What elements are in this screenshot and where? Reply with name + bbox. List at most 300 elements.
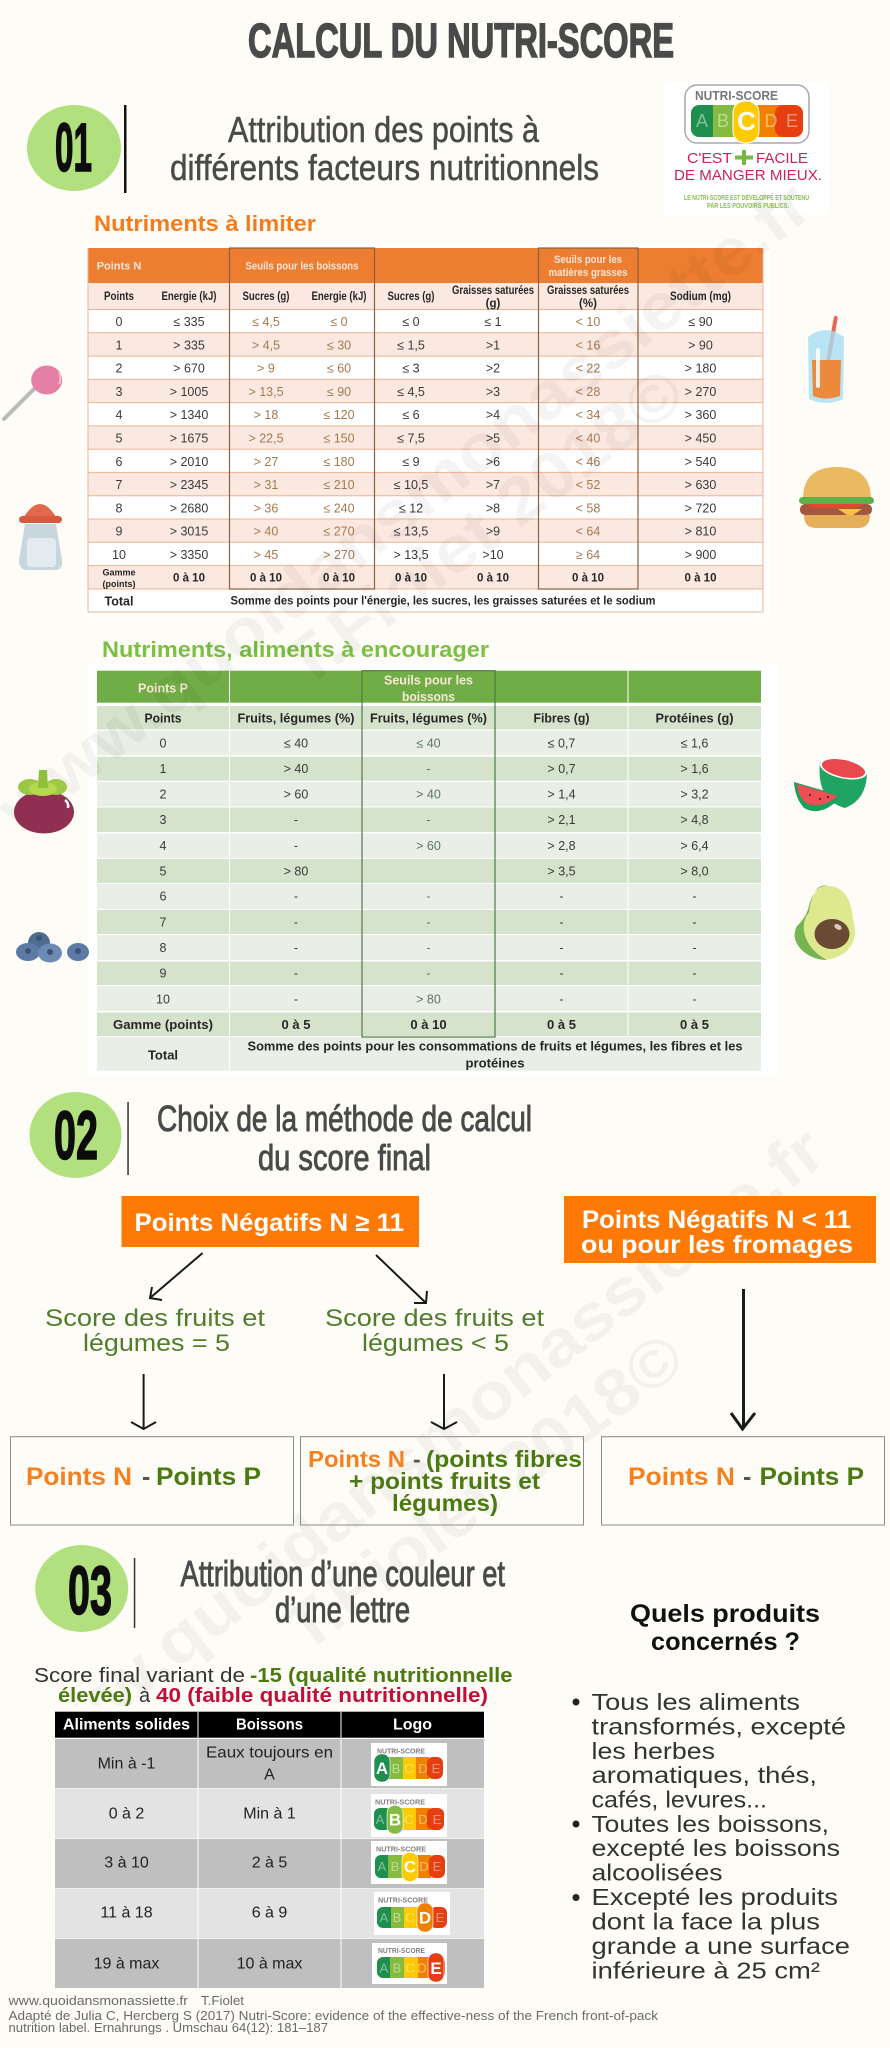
data rows P: - [426, 762, 431, 776]
text: fruit score below 5: légumes < 5 [362, 1330, 509, 1357]
header row [55, 1712, 484, 1738]
row bands [55, 1739, 484, 1988]
logo D: D [419, 1908, 431, 1928]
data rows N: > 9 [257, 362, 275, 376]
logo D: E [436, 1910, 445, 1925]
slice [794, 782, 842, 811]
data rows P: - [294, 967, 298, 981]
range row P: 0 à 5 [282, 1017, 310, 1032]
data rows N: >6 [486, 455, 500, 469]
text: final score range: 40 (faible qualité nutritionnelle) [156, 1685, 488, 1707]
data rows P: > 0,7 [547, 762, 576, 776]
divider 01 [124, 105, 126, 193]
result box middle: (points fibres [426, 1446, 582, 1472]
data rows P: > 80 [284, 864, 308, 878]
data rows P: 2 [160, 787, 167, 801]
heading: nutriments à limiter: Nutriments à limiter [94, 211, 316, 236]
icon: mangosteen [14, 770, 74, 834]
logo E: E [430, 1959, 442, 1978]
data rows N: ≤ 210 [323, 478, 355, 492]
header row: Logo [393, 1716, 432, 1734]
data rows N: >2 [486, 362, 500, 376]
data rows P: - [426, 941, 431, 955]
column headings P: Fibres (g) [534, 710, 590, 726]
arrow: to score equals 5 [150, 1253, 203, 1300]
range row N: (points) [102, 579, 136, 589]
logo E: C [405, 1960, 415, 1976]
heading 02 [157, 1098, 532, 1178]
data rows N: >3 [486, 385, 500, 399]
data rows N: < 34 [576, 408, 600, 422]
heading 03: Attribution d’une couleur et [180, 1553, 505, 1594]
box: N below 11 or cheese: ou pour les fromages [581, 1231, 853, 1259]
data rows P: ≤ 0,7 [548, 737, 575, 751]
data rows N: > 27 [254, 455, 278, 469]
data rows P: > 4,8 [680, 813, 709, 827]
total row P: Somme des points pour les consommations de fruits et légumes, les fibres et les [248, 1038, 742, 1054]
Nutri-Score campaign logo: D [764, 111, 778, 131]
data rows P: > 1,4 [547, 787, 576, 801]
range row N: 0 à 10 [395, 572, 427, 584]
data rows N: 9 [116, 525, 123, 539]
logo B: NUTRI-SCORE [375, 1798, 425, 1806]
number badge 01: 01 [55, 109, 92, 186]
header band P: Seuils pour les [384, 672, 473, 688]
logo B: B [389, 1810, 401, 1830]
box: N below 11 or cheese [564, 1196, 876, 1263]
row text: 0 à 2 [109, 1806, 144, 1822]
data rows P: ≤ 40 [416, 737, 441, 751]
heading: nutriments à encourager: Nutriments, aliments à encourager [102, 637, 489, 662]
arrow: to score below 5 [376, 1255, 427, 1303]
data rows N: > 1675 [170, 431, 208, 445]
data rows N: < 46 [576, 455, 600, 469]
bullet one: les herbes [592, 1738, 715, 1764]
number badge 03: 03 [68, 1552, 112, 1629]
text: fruit score equals 5: légumes = 5 [83, 1330, 230, 1357]
logo B: D [418, 1812, 428, 1827]
beverage threshold box P [362, 671, 495, 1037]
data rows P: - [294, 941, 298, 955]
data rows N: ≤ 240 [323, 502, 355, 516]
data rows P: - [294, 992, 298, 1006]
column headings N: Points [104, 291, 134, 303]
data rows P: > 8,0 [680, 864, 709, 878]
data rows N: ≤ 4,5 [252, 315, 280, 329]
data rows N: ≤ 1 [484, 315, 502, 329]
data rows P: - [692, 890, 697, 904]
data rows N: ≤ 180 [323, 455, 355, 469]
text: fruit score below 5: Score des fruits et [325, 1305, 544, 1332]
data rows N: 2 [116, 362, 123, 376]
data rows N: < 28 [576, 385, 600, 399]
data rows N: 8 [116, 502, 123, 516]
icon: lollipop [4, 366, 62, 419]
range row N: 0 à 10 [477, 572, 509, 584]
data rows N: ≤ 90 [327, 385, 351, 399]
logo B: C [404, 1812, 414, 1827]
data rows N: ≤ 4,5 [397, 385, 425, 399]
row text: 2 à 5 [252, 1854, 287, 1872]
data rows N: > 90 [688, 338, 713, 352]
data rows P: - [559, 967, 564, 981]
column headings N: Energie (kJ) [312, 291, 367, 303]
data rows N: >8 [486, 502, 500, 516]
data rows P: - [559, 941, 564, 955]
footer credits: www.quoidansmonassiette.fr [7, 1993, 189, 2008]
logo E: A [380, 1960, 389, 1976]
logo A: B [392, 1761, 400, 1776]
logo D: A [380, 1910, 389, 1925]
data rows P: 9 [160, 967, 167, 981]
range row N: 0 à 10 [572, 572, 604, 584]
data rows P: > 3,5 [547, 864, 576, 878]
data rows N: < 40 [576, 431, 600, 445]
column headings N: Graisses saturées [547, 285, 629, 297]
data rows N: > 2010 [170, 455, 208, 469]
table: points P [88, 664, 778, 1076]
data rows N: 7 [116, 478, 123, 492]
data rows P: > 6,4 [680, 839, 709, 853]
range row P: Gamme (points) [113, 1017, 213, 1032]
result box left [10, 1437, 294, 1525]
text: final score range: -15 (qualité nutritionnelle [250, 1665, 512, 1687]
data rows N: ≤ 335 [173, 315, 205, 329]
data rows N: ≤ 30 [327, 338, 351, 352]
column headings N: Sucres (g) [242, 291, 290, 303]
result box middle [300, 1437, 584, 1525]
data rows P: > 3,2 [680, 787, 709, 801]
data rows N: > 900 [685, 548, 716, 562]
data rows N: ≤ 10,5 [394, 478, 428, 492]
bullet three [592, 1884, 850, 1984]
bullet three: Excepté les produits [592, 1884, 838, 1910]
data rows N: ≤ 270 [323, 525, 355, 539]
range row P: 0 à 5 [680, 1017, 709, 1032]
data rows P: - [692, 967, 697, 981]
list: products concerned [572, 1689, 850, 1984]
logo A [371, 1743, 447, 1786]
data rows N: ≤ 3 [402, 362, 420, 376]
footer credits: T.Fiolet [201, 1993, 244, 2008]
range row P [113, 1017, 709, 1032]
row lines [88, 248, 763, 612]
Nutri-Score campaign logo [664, 82, 829, 215]
logo C [371, 1841, 447, 1884]
bullet three: dont la face la plus [592, 1908, 820, 1934]
row text: A [264, 1766, 275, 1784]
data rows N: > 36 [254, 502, 278, 516]
table: points N [84, 244, 770, 617]
icon: avocado [795, 886, 855, 960]
data rows N: > 2680 [170, 502, 208, 516]
heading 02: Choix de la méthode de calcul [157, 1098, 532, 1139]
data rows P: 4 [160, 839, 167, 853]
logo E: B [393, 1960, 401, 1976]
data rows N: >4 [486, 408, 500, 422]
data rows N: ≤ 120 [323, 408, 355, 422]
data rows P: - [559, 992, 564, 1006]
header band N: Seuils pour les boissons [246, 260, 358, 272]
data rows P: - [692, 915, 697, 929]
result box middle: légumes) [392, 1490, 498, 1516]
data rows N: > 45 [254, 548, 278, 562]
data rows N: ≤ 13,5 [394, 525, 428, 539]
header band P: Points P [138, 680, 188, 696]
total row N [105, 594, 656, 608]
column headings N [104, 285, 731, 310]
Nutri-Score campaign logo: PAR LES POUVOIRS PUBLICS. [707, 201, 789, 210]
total row N: Somme des points pour l'énergie, les sucres, les graisses saturées et le sodium [230, 596, 656, 608]
footer credits: nutrition label. Ernahrungs . Umschau 64(12): 181–187 [8, 2020, 328, 2035]
data rows N: > 450 [685, 431, 716, 445]
heading 02: du score final [258, 1137, 431, 1178]
Nutri-Score campaign logo: C [737, 106, 756, 136]
data rows P: - [426, 890, 431, 904]
bullet three: inférieure à 25 cm² [592, 1958, 820, 1984]
data rows N: 6 [116, 455, 123, 469]
result box middle: Points N [308, 1446, 405, 1472]
data rows N: > 2345 [170, 478, 208, 492]
result box right: Points P [760, 1463, 864, 1491]
row text: 11 à 18 [100, 1904, 153, 1922]
data rows N: ≥ 64 [576, 548, 600, 562]
data rows N: > 360 [685, 408, 716, 422]
data rows N: < 52 [576, 478, 600, 492]
data rows N: 0 [116, 315, 123, 329]
bullet two: Toutes les boissons, [592, 1811, 829, 1837]
section 03 header [35, 1545, 505, 1632]
heading: which products [630, 1600, 820, 1656]
logo A: D [418, 1761, 428, 1776]
data rows N: >10 [482, 548, 504, 562]
bullet three: grande a une surface [592, 1933, 850, 1959]
header row: Boissons [236, 1716, 303, 1734]
data rows N: > 540 [685, 455, 716, 469]
data rows P: - [294, 813, 298, 827]
data rows P: ≤ 40 [284, 737, 308, 751]
data rows N: ≤ 0 [402, 315, 420, 329]
icon: juice glass [808, 318, 844, 403]
beverage and fat threshold boxes [230, 248, 638, 589]
icon: salt shaker [19, 504, 62, 570]
data rows P: 10 [156, 992, 170, 1006]
range row N: 0 à 10 [173, 572, 205, 584]
data rows N: < 22 [576, 362, 600, 376]
text: fruit score equals 5: Score des fruits et [45, 1305, 265, 1332]
divider 03 [134, 1558, 135, 1628]
logo A: E [432, 1761, 441, 1776]
number badge 02 [30, 1092, 122, 1178]
logo E: NUTRI-SCORE [378, 1946, 425, 1955]
data rows N: >5 [486, 431, 500, 445]
total row P: protéines [466, 1056, 524, 1070]
column headings N: Energie (kJ) [162, 291, 217, 303]
bullet one: Tous les aliments [592, 1689, 800, 1715]
total row P [148, 1038, 742, 1070]
logo D: B [393, 1910, 401, 1925]
data rows N [112, 315, 716, 562]
footer credits: Adapté de Julia C, Hercberg S (2017) Nutri-Score: evidence of the effective-ness of the French front-of-pack [8, 2008, 659, 2023]
heading 03: d’une lettre [275, 1589, 410, 1630]
row text: 6 à 9 [252, 1904, 287, 1922]
data rows N: ≤ 7,5 [397, 431, 425, 445]
header band P [97, 671, 761, 704]
data rows N: < 64 [576, 525, 600, 539]
data rows P: 8 [160, 941, 167, 955]
column headings N: Sucres (g) [388, 291, 435, 303]
heading 01: Attribution des points à [228, 109, 540, 150]
logo C: B [391, 1859, 399, 1874]
result box left: Points P [156, 1463, 261, 1491]
text: final score range: Score final variant de [34, 1665, 245, 1687]
data rows N: ≤ 9 [402, 455, 420, 469]
logo A: A [376, 1759, 388, 1778]
header band N [88, 248, 763, 283]
arrow: down middle [431, 1374, 457, 1429]
alternating row bands [88, 283, 763, 589]
data rows N: >1 [486, 338, 500, 352]
data rows P: - [559, 915, 564, 929]
data rows N: < 10 [576, 315, 600, 329]
text: final score range: à [139, 1685, 151, 1707]
data rows N: > 3350 [170, 548, 208, 562]
watermark top: www.quoidansmonassiette.fr [0, 166, 825, 847]
range row P: 0 à 10 [410, 1017, 447, 1032]
Nutri-Score campaign logo: C'EST [687, 150, 732, 167]
bullet one: aromatiques, thés, [592, 1762, 817, 1788]
Nutri-Score campaign logo: LE NUTRI-SCORE EST DÉVELOPPÉ ET SOUTENU [684, 193, 809, 202]
data rows P: > 60 [416, 839, 441, 853]
Nutri-Score campaign logo: B [717, 111, 729, 131]
bullet two: excepté les boissons [592, 1835, 840, 1861]
section 01 header [27, 105, 599, 193]
data rows P: > 2,8 [547, 839, 576, 853]
data rows N: ≤ 6 [402, 408, 420, 422]
watermark top: T.Fiolet 2018© [269, 353, 697, 701]
data rows P: > 40 [416, 787, 441, 801]
data rows P [156, 737, 709, 1006]
text: fruit score equals 5 [45, 1305, 265, 1357]
text: final score range: élevée) [58, 1685, 132, 1707]
logo C: C [404, 1858, 416, 1876]
data rows N: > 13,5 [248, 385, 284, 399]
big half [818, 754, 869, 808]
data rows P: > 2,1 [547, 813, 576, 827]
data rows P: - [692, 941, 697, 955]
data rows N: ≤ 150 [323, 431, 355, 445]
data rows P: 3 [160, 813, 167, 827]
header band N: Seuils pour les [554, 254, 622, 266]
logo D: NUTRI-SCORE [378, 1896, 428, 1904]
arrow: down left [131, 1374, 156, 1429]
data rows N: > 3015 [170, 525, 208, 539]
title: CALCUL DU NUTRI-SCORE [248, 15, 674, 68]
result box middle: + points fruits et [349, 1468, 540, 1494]
column headings N: Graisses saturées [452, 285, 534, 297]
logo D: C [405, 1910, 415, 1925]
column headings P: Protéines (g) [656, 710, 734, 726]
data rows N: > 22,5 [248, 431, 284, 445]
data rows P: 7 [160, 915, 167, 929]
result box right [602, 1437, 884, 1525]
data rows N: ≤ 12 [399, 502, 423, 516]
row text: 19 à max [94, 1956, 159, 1972]
data rows N: < 16 [576, 338, 600, 352]
data rows N: 1 [116, 338, 123, 352]
logo E: D [417, 1960, 427, 1976]
column headings N: (g) [486, 298, 501, 310]
total row P: Total [148, 1048, 178, 1062]
data rows N: < 58 [576, 502, 600, 516]
data rows N: ≤ 60 [327, 362, 351, 376]
data rows P: - [426, 967, 431, 981]
result box middle: - [413, 1446, 421, 1472]
watermark bottom: T.Fiolet 2018© [269, 1318, 697, 1666]
data rows P: - [426, 915, 431, 929]
data rows N: > 18 [254, 408, 278, 422]
heading 01 [170, 109, 599, 188]
row text [94, 1744, 333, 1972]
data rows P: - [692, 992, 697, 1006]
data rows N: ≤ 0 [330, 315, 348, 329]
box: N at least 11 [122, 1196, 419, 1247]
column headings P: Points [144, 710, 182, 726]
logo C: E [433, 1859, 442, 1874]
row text: Eaux toujours en [206, 1744, 333, 1762]
data rows N: > 270 [685, 385, 716, 399]
data rows P: ≤ 1,6 [681, 737, 708, 751]
logo B: A [376, 1812, 385, 1827]
header band N: matières grasses [548, 267, 628, 279]
number badge 01 [27, 105, 121, 191]
logo A: C [404, 1761, 414, 1776]
bullet two: alcoolisées [592, 1860, 722, 1886]
heading 03 [180, 1553, 505, 1630]
logo B [371, 1794, 447, 1837]
logo B: E [433, 1812, 442, 1827]
data rows N: ≤ 1,5 [397, 338, 425, 352]
range row N: 0 à 10 [250, 572, 282, 584]
data rows N: 5 [116, 431, 123, 445]
row text: Min à -1 [98, 1756, 156, 1772]
data rows P: 0 [160, 737, 167, 751]
result box right: Points N [628, 1463, 735, 1491]
data rows P: 1 [160, 762, 167, 776]
table: colour and letter [0, 1706, 490, 1992]
footer credits [7, 1993, 659, 2035]
heading 01: différents facteurs nutritionnels [170, 147, 599, 188]
column headings N: (%) [579, 298, 597, 310]
data rows N: > 180 [685, 362, 716, 376]
row text: 3 à 10 [104, 1854, 149, 1872]
data rows N: 10 [112, 548, 126, 562]
data rows N: > 270 [323, 548, 355, 562]
icon: watermelon [794, 754, 869, 811]
data rows N: > 1005 [170, 385, 208, 399]
data rows N: 3 [116, 385, 123, 399]
column headings P: Fruits, légumes (%) [238, 710, 354, 726]
column headings P [144, 710, 734, 726]
number badge 02: 02 [54, 1097, 98, 1174]
data rows P: - [426, 813, 431, 827]
data rows N: > 31 [254, 478, 278, 492]
bullet two [592, 1811, 840, 1886]
logo C: NUTRI-SCORE [376, 1844, 426, 1854]
Nutri-Score campaign logo: E [786, 111, 798, 131]
header band N: Points N [97, 260, 141, 272]
data rows N: > 13,5 [393, 548, 429, 562]
